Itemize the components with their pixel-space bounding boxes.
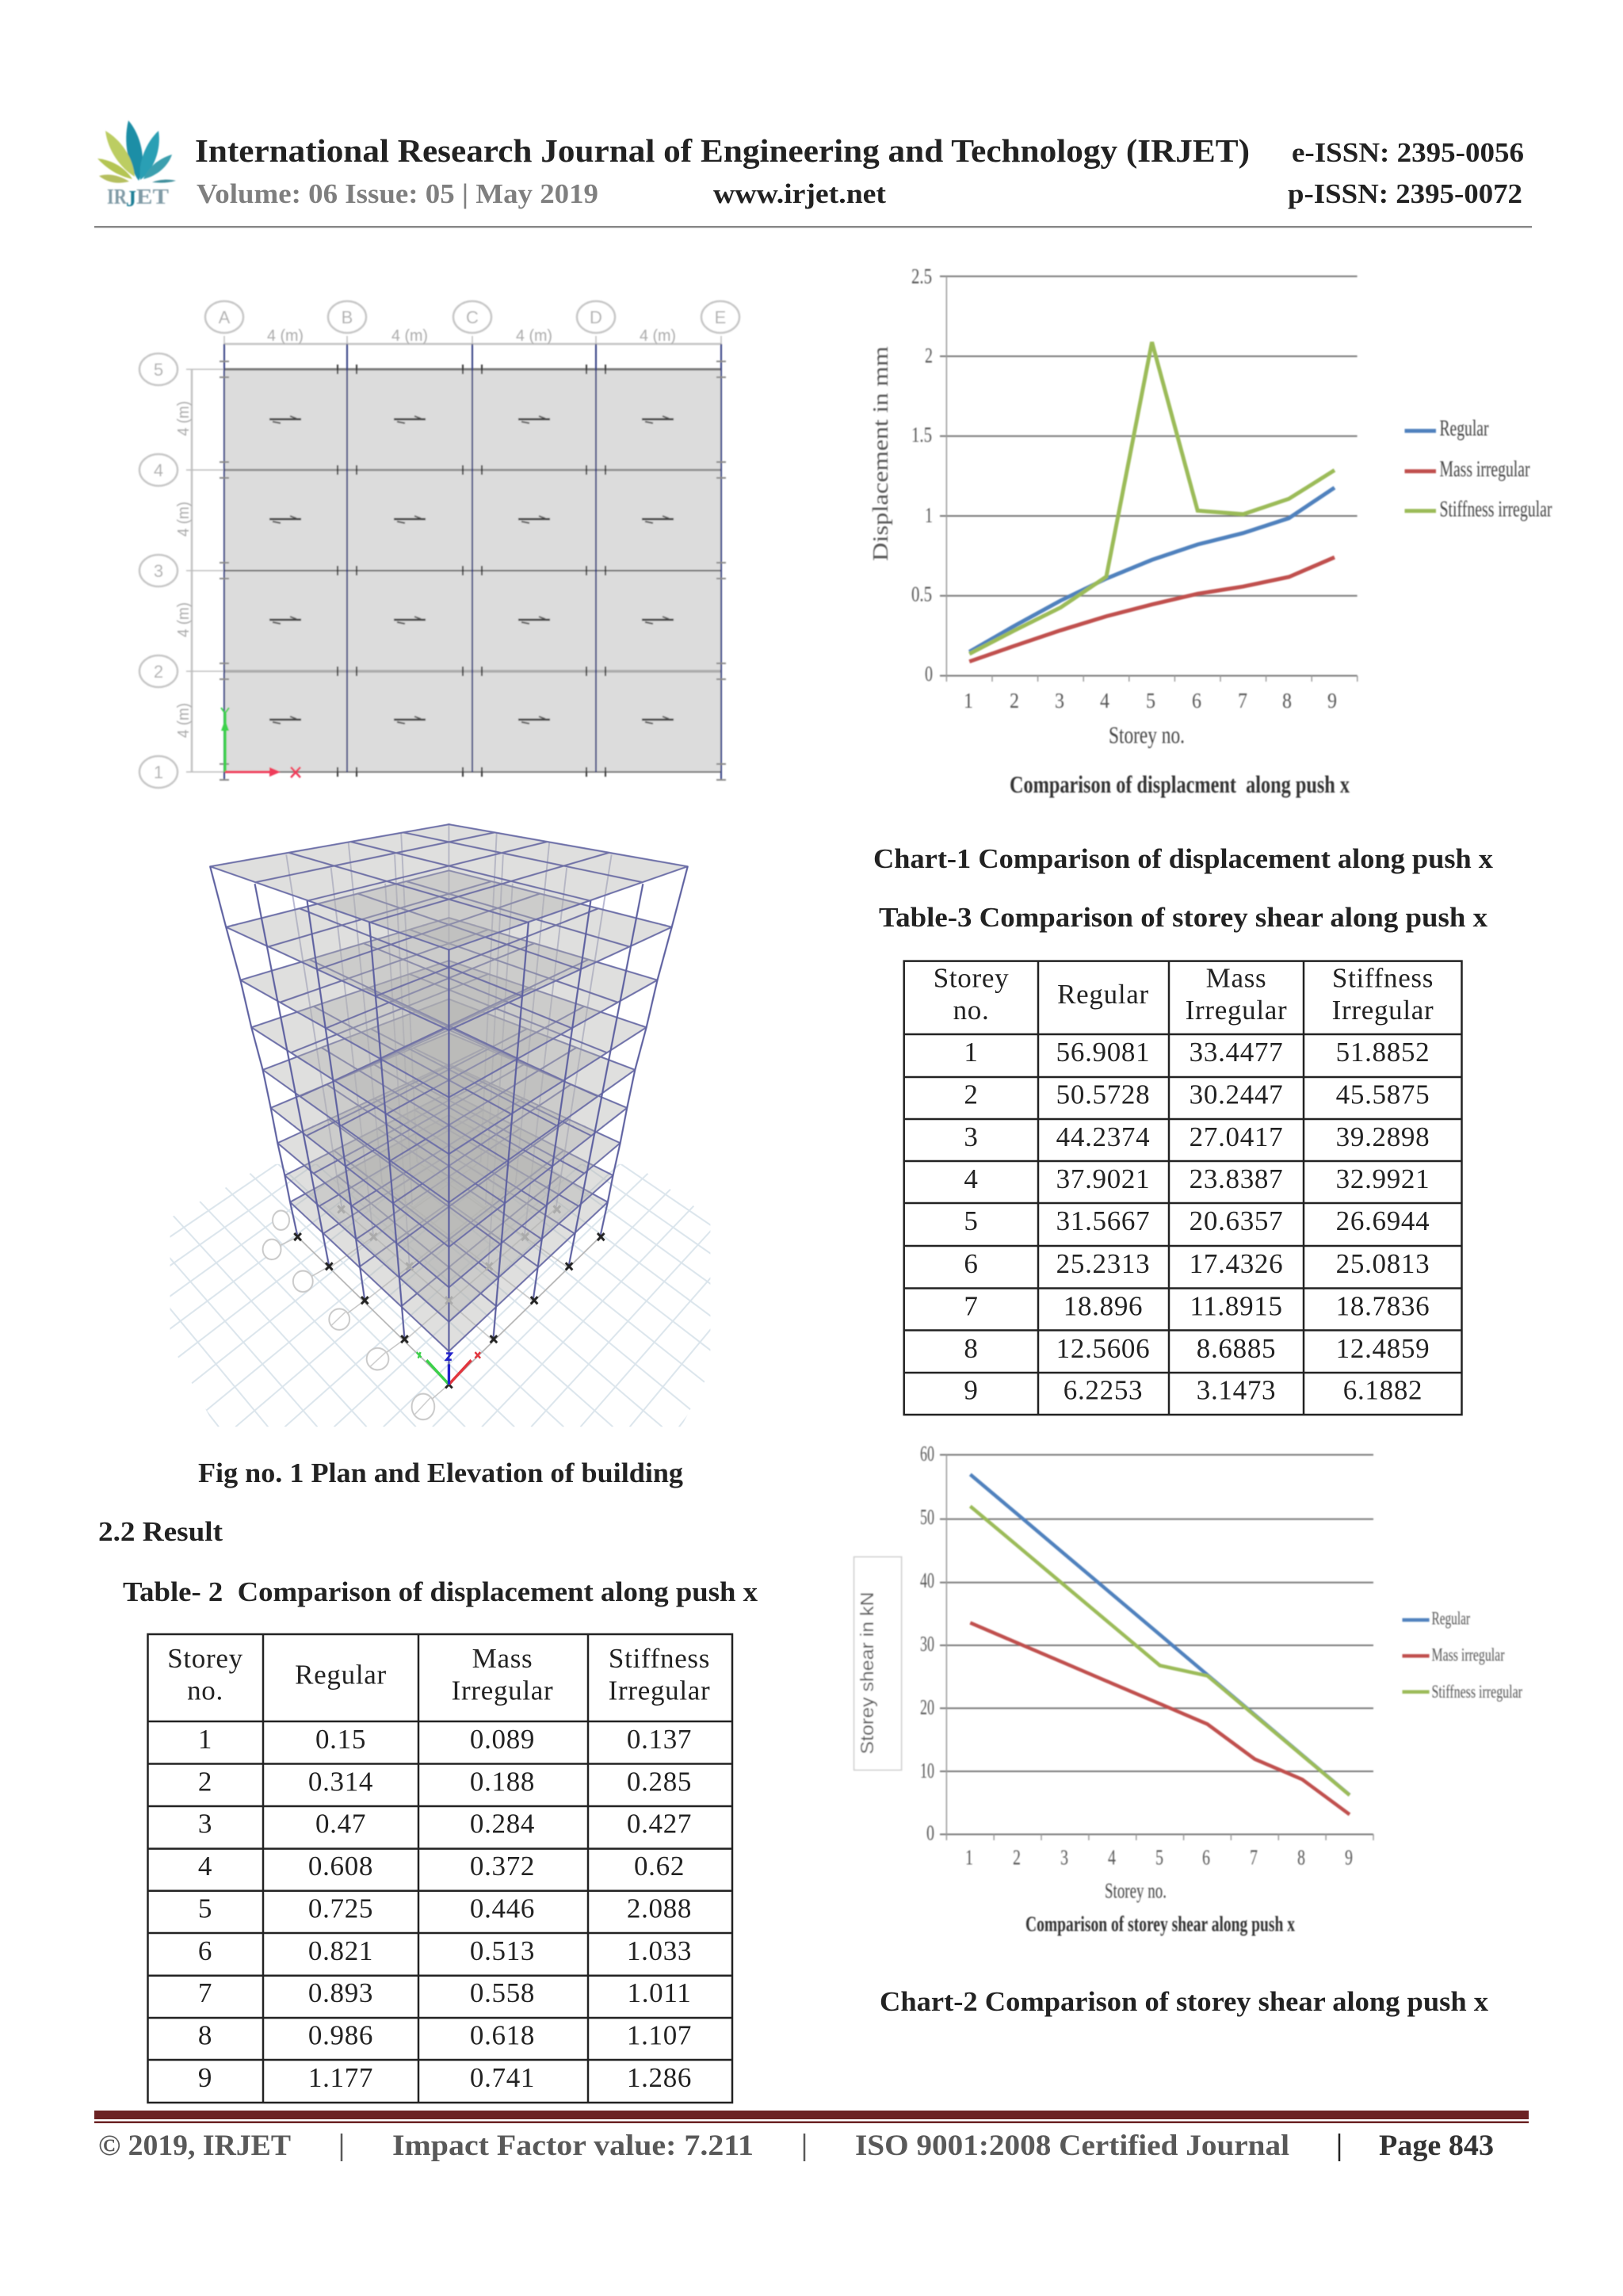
chart 2 y axis values: 20 <box>920 1695 934 1719</box>
legend: Mass irregular <box>1439 457 1530 482</box>
chart 2 x axis values: 7 <box>1250 1845 1258 1869</box>
table 3 rows: 17.4326 <box>1190 1248 1283 1279</box>
copyright: © 2019, IRJET <box>98 2130 291 2162</box>
table 3 rows: 6.1882 <box>1343 1375 1423 1406</box>
table 3 rows: 12.5606 <box>1056 1333 1150 1364</box>
chart 2 x axis values: 4 <box>1108 1845 1116 1869</box>
chart 2 x axis values: 3 <box>1060 1845 1068 1869</box>
caption: table 2: Table- 2 Comparison of displacement along push x <box>123 1576 758 1607</box>
legend <box>1403 1608 1522 1702</box>
front columns <box>210 866 688 1385</box>
table 2 rows: 8 <box>198 2019 212 2051</box>
table 3 header: Regular <box>1057 979 1149 1010</box>
table 2 rows: 3 <box>198 1809 212 1839</box>
table 2: displacement <box>147 1634 732 2103</box>
figure: building floor plan: 4 (m) <box>175 602 193 637</box>
volume and issue: Volume: 06 Issue: 05 | May 2019 <box>197 178 598 209</box>
legend: Regular <box>1439 416 1489 441</box>
y axis title: Storey shear in kN <box>857 1592 877 1755</box>
table 3 header: Irregular <box>1332 995 1434 1026</box>
y axis label box <box>854 1557 902 1770</box>
table 3 rows: 3 <box>964 1121 979 1152</box>
table 2 rows: 0.47 <box>315 1809 366 1839</box>
chart 1 x axis values <box>964 689 1337 712</box>
table 2 header: Storey <box>167 1643 243 1674</box>
table 2 rows: 0.285 <box>627 1766 692 1797</box>
chart 1 y axis values: 1 <box>925 503 933 527</box>
axis triad <box>417 1352 480 1385</box>
chart 1 x axis values: 3 <box>1055 689 1064 712</box>
series: mass irregular <box>969 557 1335 662</box>
figure: building floor plan: 4 (m) <box>391 327 428 345</box>
chart 2 x axis values: 5 <box>1155 1845 1163 1869</box>
figure: building floor plan: 4 (m) <box>175 502 193 537</box>
table 3 rows: 50.5728 <box>1056 1079 1150 1110</box>
table 2 rows <box>198 1724 692 2093</box>
chart 1 y axis values: 0.5 <box>911 582 932 606</box>
table 3 rows: 6 <box>964 1248 979 1279</box>
e-ISSN: e-ISSN: 2395-0056 <box>1292 137 1524 168</box>
chart 1 y axis values: 2 <box>925 344 933 368</box>
series: stiffness irregular <box>969 342 1335 654</box>
table 3 rows: 4 <box>964 1163 979 1194</box>
chart 2 x axis values <box>965 1845 1353 1869</box>
header: journal masthead <box>94 120 1532 228</box>
x axis title: Storey no. <box>1105 1878 1167 1902</box>
chart 2 y axis values: 30 <box>920 1632 934 1656</box>
table 2 rows: 0.618 <box>470 2019 535 2051</box>
table 3 rows: 11.8915 <box>1190 1290 1283 1321</box>
chart 1 y axis values <box>911 265 933 686</box>
chart 2 y axis values: 10 <box>920 1759 934 1782</box>
figure: building floor plan: 5 <box>154 360 163 380</box>
table 2 rows: 0.15 <box>315 1724 366 1755</box>
table 3 header: Irregular <box>1186 995 1287 1026</box>
table 3 header: Stiffness <box>1332 962 1434 994</box>
table 2 rows: 1.107 <box>627 2019 692 2051</box>
table 3 rows: 12.4859 <box>1336 1333 1430 1364</box>
table 3 rows: 25.2313 <box>1056 1248 1150 1279</box>
table 2 rows: 0.446 <box>470 1893 535 1924</box>
table 3 rows: 23.8387 <box>1190 1163 1283 1194</box>
series: regular <box>970 1474 1350 1795</box>
figure: building floor plan: C <box>466 308 479 327</box>
table 2 rows: 0.188 <box>470 1766 535 1797</box>
column base supports <box>294 1205 605 1388</box>
table 3 rows: 5 <box>964 1205 979 1236</box>
table 2 header: Regular <box>295 1660 387 1690</box>
table 3 rows: 8.6885 <box>1197 1333 1276 1364</box>
chart 2 title: Comparison of storey shear along push x <box>1025 1912 1295 1935</box>
impact factor: Impact Factor value: 7.211 <box>392 2130 754 2162</box>
table 2 rows: 0.372 <box>470 1851 535 1881</box>
table 2 rows: 4 <box>198 1851 212 1881</box>
table 2 rows: 0.725 <box>308 1893 373 1924</box>
figure: building floor plan: A <box>219 308 231 327</box>
chart 2 y axis values: 40 <box>920 1568 934 1592</box>
p-ISSN: p-ISSN: 2395-0072 <box>1288 178 1522 209</box>
table 3 rows: 30.2447 <box>1190 1079 1283 1110</box>
chart 1 y axis values: 2.5 <box>911 265 932 288</box>
series: mass irregular <box>970 1623 1350 1814</box>
legend <box>1404 416 1552 521</box>
section heading: 2.2 Result: 2.2 Result <box>98 1516 223 1547</box>
table 2 header: Stiffness <box>609 1643 710 1674</box>
table 3 rows: 2 <box>964 1079 979 1110</box>
table 3 rows: 1 <box>964 1037 979 1068</box>
caption: figure 1: Fig no. 1 Plan and Elevation of building <box>198 1457 684 1488</box>
chart 2 x axis values: 2 <box>1013 1845 1021 1869</box>
chart 2 y axis values: 50 <box>920 1505 934 1529</box>
table 3 header: no. <box>953 995 989 1026</box>
icon: IRJET logo: J <box>126 186 136 212</box>
table 2 rows: 0.62 <box>634 1851 685 1881</box>
table 2 rows: 1 <box>198 1724 212 1755</box>
legend: Mass irregular <box>1431 1645 1505 1665</box>
table 2 rows: 0.893 <box>308 1977 373 2008</box>
x axis title: Storey no. <box>1109 721 1185 748</box>
page number: Page 843 <box>1379 2130 1494 2162</box>
figure: building floor plan: 4 (m) <box>175 401 193 436</box>
table 2 rows: 1.177 <box>308 2062 373 2093</box>
table 3 rows: 33.4477 <box>1190 1037 1283 1068</box>
table 2 rows: 0.137 <box>627 1724 692 1755</box>
table 3 rows: 6.2253 <box>1064 1375 1143 1406</box>
table 3: storey shear <box>904 961 1461 1415</box>
figure: building floor plan: 4 (m) <box>267 327 304 345</box>
footer <box>94 2111 1529 2162</box>
chart 2 y axis values: 0 <box>926 1821 934 1845</box>
chart 2 x axis values: 9 <box>1345 1845 1353 1869</box>
figure: building floor plan: 4 (m) <box>175 703 193 738</box>
table 3 rows: 31.5667 <box>1056 1205 1150 1236</box>
series: regular <box>969 487 1335 651</box>
back columns <box>286 824 612 1266</box>
table 2 rows: 0.821 <box>308 1935 373 1966</box>
table 3 rows: 27.0417 <box>1190 1121 1283 1152</box>
chart 1 x axis values: 8 <box>1282 689 1292 712</box>
table 2 rows: 7 <box>198 1977 212 2008</box>
chart 1 y axis values: 1.5 <box>911 423 932 447</box>
caption: chart 1: Chart-1 Comparison of displacement along push x <box>873 843 1494 874</box>
table 2 rows: 0.427 <box>627 1809 692 1839</box>
table 2 rows: 2.088 <box>627 1893 692 1924</box>
table 3 rows: 45.5875 <box>1336 1079 1430 1110</box>
table 2 rows: 0.608 <box>308 1851 373 1881</box>
table 2 header: Irregular <box>452 1675 553 1706</box>
figure: building floor plan: 4 <box>154 460 163 480</box>
table 3 rows: 18.896 <box>1064 1290 1143 1321</box>
figure: building floor plan: 3 <box>154 561 163 581</box>
legend: Regular <box>1431 1608 1470 1628</box>
table 2 rows: 2 <box>198 1766 212 1797</box>
table 3 rows: 56.9081 <box>1056 1037 1150 1068</box>
icon: IRJET logo: IR <box>107 185 127 208</box>
table 3 rows: 25.0813 <box>1336 1248 1430 1279</box>
certification: ISO 9001:2008 Certified Journal <box>855 2130 1289 2162</box>
chart 1 title: Comparison of displacment along push x <box>1010 770 1350 798</box>
chart 2 x axis values: 6 <box>1202 1845 1210 1869</box>
table 3 rows: 3.1473 <box>1197 1375 1276 1406</box>
figure: building floor plan <box>139 301 739 788</box>
table 3 rows: 20.6357 <box>1190 1205 1283 1236</box>
table 3 rows: 39.2898 <box>1336 1121 1430 1152</box>
table 3 rows <box>964 1037 1430 1406</box>
chart 2 x axis values: 1 <box>965 1845 973 1869</box>
legend: Stiffness irregular <box>1439 496 1552 521</box>
table 2 header: no. <box>187 1675 223 1706</box>
icon: IRJET logo <box>97 120 176 212</box>
chart 1 x axis values: 5 <box>1146 689 1155 712</box>
chart 1 x axis values: 7 <box>1238 689 1247 712</box>
chart 2: storey shear line chart <box>854 1442 1522 1935</box>
chart 1 x axis values: 4 <box>1100 689 1109 712</box>
table 3 rows: 8 <box>964 1333 979 1364</box>
table 2 rows: 0.741 <box>470 2062 535 2093</box>
chart 2 y axis values <box>920 1442 934 1845</box>
table 2 rows: 9 <box>198 2062 212 2093</box>
ground grid <box>170 1163 710 1427</box>
journal title: International Research Journal of Engineering and Technology (IRJET) <box>195 132 1250 169</box>
table 3 header <box>934 962 1434 1026</box>
table 2 rows: 0.513 <box>470 1935 535 1966</box>
table 3 rows: 26.6944 <box>1336 1205 1430 1236</box>
icon: IRJET logo: ET <box>136 185 169 208</box>
figure: building floor plan: 4 (m) <box>640 327 676 345</box>
table 3 rows: 9 <box>964 1375 979 1406</box>
chart 1 y axis values: 0 <box>925 662 933 686</box>
table 2 rows: 1.286 <box>627 2062 692 2093</box>
table 3 rows: 51.8852 <box>1336 1037 1430 1068</box>
figure: building floor plan: 2 <box>154 662 163 682</box>
table 2 header: Mass <box>472 1643 533 1674</box>
chart 1 x axis values: 1 <box>964 689 973 712</box>
series: stiffness irregular <box>970 1506 1350 1795</box>
table 2 rows: 1.011 <box>628 1977 691 2008</box>
figure: building floor plan: 1 <box>154 762 163 782</box>
chart 2 y axis values: 60 <box>920 1442 934 1465</box>
table 2 header <box>167 1643 710 1706</box>
table 3 header: Storey <box>934 962 1009 994</box>
storey slabs <box>210 824 688 1351</box>
base grid and grid bubbles <box>263 1162 600 1419</box>
table 3 rows: 37.9021 <box>1056 1163 1150 1194</box>
figure: building floor plan: B <box>342 308 353 327</box>
table 2 rows: 0.986 <box>308 2019 373 2051</box>
table 3 rows: 44.2374 <box>1056 1121 1150 1152</box>
table 2 rows: 0.558 <box>470 1977 535 2008</box>
chart 1 x axis values: 2 <box>1010 689 1019 712</box>
table 3 rows: 18.7836 <box>1336 1290 1430 1321</box>
table 2 rows: 1.033 <box>627 1935 692 1966</box>
table 2 rows: 0.089 <box>470 1724 535 1755</box>
y axis title: Displacement in mm <box>869 346 892 561</box>
caption: table 3: Table-3 Comparison of storey shear along push x <box>879 902 1488 933</box>
table 2 rows: 0.314 <box>308 1766 373 1797</box>
table 3 rows: 32.9921 <box>1336 1163 1430 1194</box>
chart 1 x axis values: 9 <box>1327 689 1337 712</box>
figure: 3D building frame <box>170 823 710 1427</box>
figure: building floor plan: D <box>590 308 602 327</box>
table 2 rows: 5 <box>198 1893 212 1924</box>
figure: building floor plan: 4 (m) <box>516 327 552 345</box>
chart 1 x axis values: 6 <box>1192 689 1201 712</box>
chart 2 x axis values: 8 <box>1297 1845 1305 1869</box>
table 2 rows: 6 <box>198 1935 212 1966</box>
table 2 rows: 0.284 <box>470 1809 535 1839</box>
chart 1: displacement line chart <box>869 265 1552 798</box>
table 3 header: Mass <box>1206 962 1266 994</box>
table 2 header: Irregular <box>609 1675 710 1706</box>
caption: chart 2: Chart-2 Comparison of storey shear along push x <box>880 1986 1489 2017</box>
figure: building floor plan: E <box>715 308 726 327</box>
table 3 rows: 7 <box>964 1290 979 1321</box>
website: www.irjet.net <box>713 178 886 209</box>
legend: Stiffness irregular <box>1431 1682 1522 1702</box>
